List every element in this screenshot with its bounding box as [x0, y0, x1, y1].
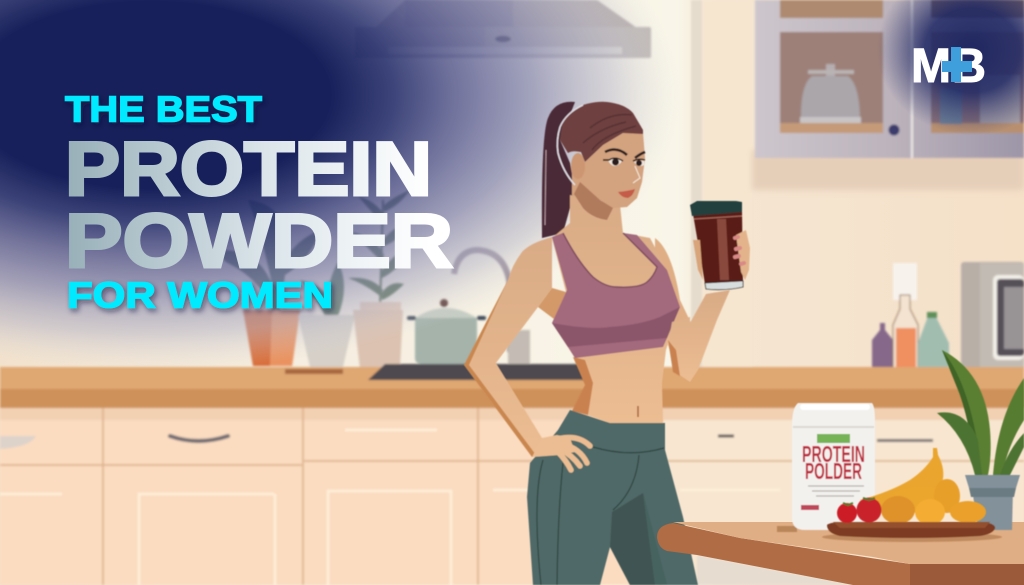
jar shadow	[777, 526, 797, 532]
bottles	[872, 263, 949, 373]
hair	[560, 102, 643, 162]
dark navy overlay	[0, 0, 1024, 366]
fingers	[693, 230, 750, 280]
navel	[637, 406, 639, 417]
plate	[827, 522, 995, 538]
wall column	[691, 0, 752, 370]
logo	[911, 40, 986, 93]
eyes and brows	[603, 150, 645, 183]
title	[65, 88, 453, 316]
left arm	[464, 237, 566, 457]
hand on hip	[532, 435, 590, 470]
ponytail	[542, 102, 575, 238]
plant pot	[965, 475, 1020, 530]
forearm	[668, 290, 730, 382]
plate shadow	[822, 532, 1002, 542]
jar label text: PROTEIN	[802, 441, 865, 467]
tall sprig	[380, 200, 383, 308]
heading: the best: THE BEST	[65, 88, 262, 130]
heading: powder: POWDER	[65, 199, 453, 284]
table	[657, 522, 1024, 585]
microwave	[961, 262, 1024, 370]
ear	[571, 153, 585, 179]
bananas	[860, 448, 943, 510]
heading: for women: FOR WOMEN	[67, 274, 333, 316]
protein powder jar	[777, 403, 875, 532]
leaves	[942, 350, 991, 475]
sink	[368, 364, 590, 380]
big leaf plant	[221, 200, 320, 310]
heading: protein: PROTEIN	[65, 127, 432, 212]
face	[572, 133, 645, 208]
torso	[552, 195, 680, 423]
shaker cup	[690, 201, 743, 290]
neck shadow	[574, 182, 613, 220]
tomatoes	[837, 503, 857, 523]
plants	[221, 190, 410, 369]
lips	[618, 189, 635, 198]
range hood	[355, 0, 651, 58]
fruit plate	[822, 448, 1002, 542]
plant pots	[243, 310, 300, 366]
jar label badge	[817, 434, 850, 443]
protein powder jar: POLDER	[805, 458, 862, 484]
outlet	[893, 263, 917, 300]
right upper arm	[655, 238, 692, 350]
wall cabinets	[752, 0, 1024, 190]
faucet	[454, 250, 510, 352]
sports bra	[552, 233, 680, 358]
sliced fruits	[915, 499, 945, 525]
headband	[557, 105, 583, 185]
base cabinets	[0, 408, 1024, 585]
woman figure	[464, 102, 750, 585]
logo: M	[911, 40, 951, 93]
foreground plant	[937, 350, 1024, 530]
cooking pot	[407, 299, 486, 364]
pants	[527, 410, 698, 585]
kitchen counter	[0, 367, 1024, 408]
logo: B	[952, 40, 986, 93]
